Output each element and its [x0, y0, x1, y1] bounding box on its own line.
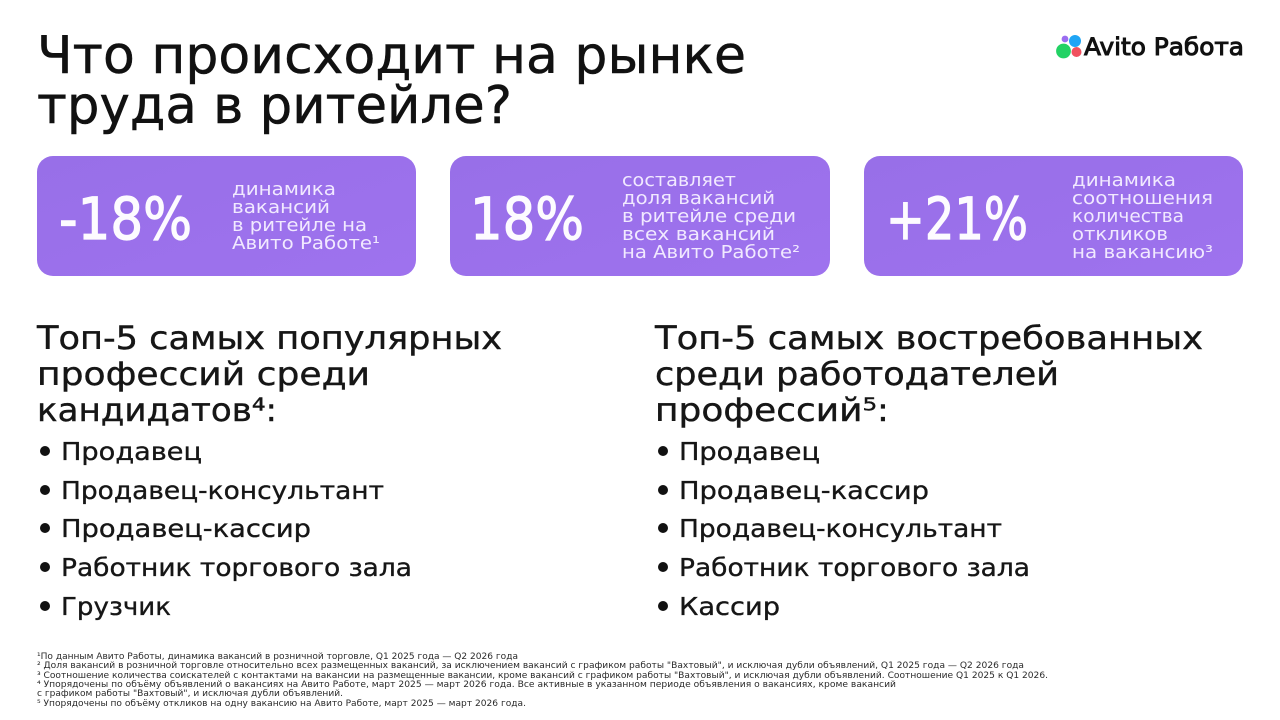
footnotes: ⁴ Упорядочены по объёму объявлений о вакансиях на Авито Работе, март 2025 — март 2026 года. Все активные в указанном периоде объявления о вакансиях, кроме вакансий: [37, 680, 896, 690]
footnotes: ³ Соотношение количества соискателей с контактами на вакансии на размещенные вакансии, кроме вакансий с графиком работы "Вахтовый", и исключая дубли объявлений. Соотношение Q1 2025 к Q1 2026.: [37, 671, 1048, 681]
list: candidate professions: [40, 437, 412, 621]
footnotes: ¹По данным Авито Работы, динамика вакансий в розничной торговле, Q1 2025 года — Q2 2026 года: [37, 652, 518, 662]
heading: top-5 among candidates: [36, 319, 502, 429]
title: Что происходит на рынке: [37, 26, 746, 86]
caption: vacancy dynamics: Авито Работе¹: [232, 233, 380, 254]
list: candidate professions: Продавец-консультант: [61, 476, 384, 505]
list: employer professions: Работник торгового зала: [679, 553, 1030, 582]
caption: retail share: доля вакансий: [622, 188, 775, 209]
caption: retail share: всех вакансий: [622, 224, 775, 245]
heading: top-5 among candidates: Топ-5 самых популярных: [36, 319, 502, 357]
footnotes: с графиком работы "Вахтовый", и исключая дубли объявлений.: [37, 689, 343, 699]
heading: top-5 among employers: среди работодателей: [655, 355, 1059, 393]
list: candidate professions: Продавец: [61, 437, 202, 466]
heading: top-5 among employers: [654, 319, 1203, 429]
caption: responses per vacancy: [1072, 170, 1213, 263]
list: employer professions: Кассир: [679, 592, 780, 621]
list: candidate professions: Грузчик: [61, 592, 171, 621]
title: труда в ритейле?: [37, 76, 512, 136]
caption: retail share: составляет: [622, 170, 736, 191]
title: [37, 26, 746, 136]
list: employer professions: Продавец-консультант: [679, 514, 1002, 543]
footnotes: [37, 652, 1048, 709]
heading: top-5 among employers: Топ-5 самых востребованных: [654, 319, 1203, 357]
caption: vacancy dynamics: [232, 179, 380, 254]
panel: retail share of vacancies: [450, 156, 830, 276]
footnotes: ² Доля вакансий в розничной торговле относительно всех размещенных вакансий, за исключением вакансий с графиком работы "Вахтовый", и исключая дубли объявлений, Q1 2025 года — Q2 2026 года: [37, 661, 1024, 671]
caption: retail share: [622, 170, 800, 263]
list: employer professions: [658, 437, 1030, 621]
caption: retail share: на Авито Работе²: [622, 242, 800, 263]
panel: vacancy dynamics: [37, 156, 416, 276]
heading: top-5 among candidates: кандидатов⁴:: [37, 391, 277, 429]
stat: +21%: +21%: [886, 185, 1028, 253]
heading: top-5 among candidates: профессий среди: [37, 355, 370, 393]
stat: -18%: -18%: [59, 185, 192, 253]
panel: responses per vacancy: [864, 156, 1243, 276]
list: candidate professions: Продавец-кассир: [61, 514, 311, 543]
caption: responses per vacancy: соотношения: [1072, 188, 1213, 209]
caption: retail share: в ритейле среди: [622, 206, 796, 227]
list: employer professions: Продавец: [679, 437, 820, 466]
list: candidate professions: Работник торгового зала: [61, 553, 412, 582]
caption: vacancy dynamics: в ритейле на: [232, 215, 367, 236]
logo: Avito Работа: Avito Работа: [1084, 33, 1244, 61]
caption: responses per vacancy: откликов: [1072, 224, 1168, 245]
heading: top-5 among employers: профессий⁵:: [655, 391, 889, 429]
caption: responses per vacancy: количества: [1072, 206, 1184, 227]
footnotes: ⁵ Упорядочены по объёму откликов на одну вакансию на Авито Работе, март 2025 — март 2026 года.: [37, 699, 526, 709]
caption: responses per vacancy: на вакансию³: [1072, 242, 1213, 263]
caption: responses per vacancy: динамика: [1072, 170, 1176, 191]
caption: vacancy dynamics: динамика: [232, 179, 336, 200]
stat: 18%: 18%: [470, 185, 584, 253]
caption: vacancy dynamics: вакансий: [232, 197, 330, 218]
list: employer professions: Продавец-кассир: [679, 476, 929, 505]
